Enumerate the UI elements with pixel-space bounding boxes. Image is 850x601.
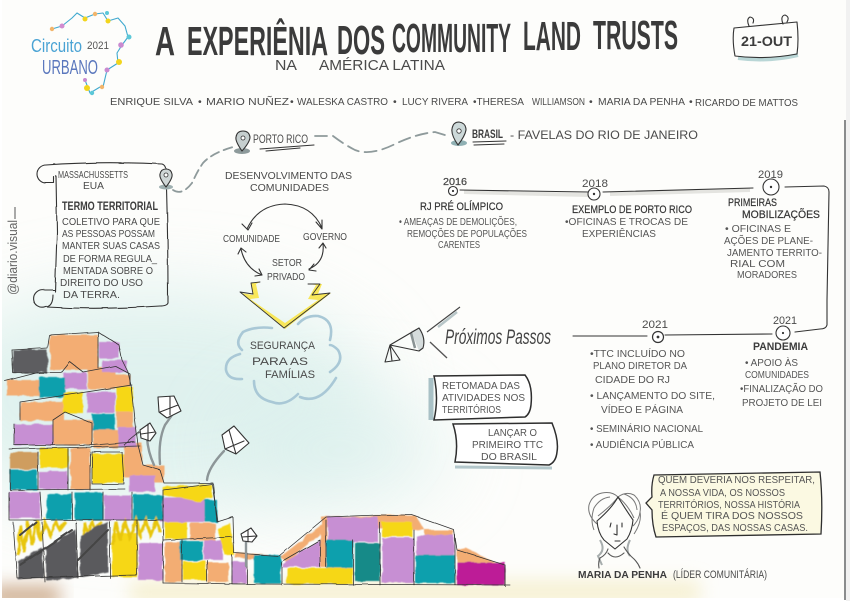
speakers list: RICARDO DE MATTOS: [695, 97, 798, 109]
title: A: [155, 18, 175, 64]
event text: [740, 356, 823, 409]
label: governo: GOVERNO: [303, 231, 347, 243]
event text: CIDADE DO RJ: [595, 375, 670, 386]
step text: [442, 381, 525, 416]
scroll body text: [60, 199, 160, 301]
scroll outline: [34, 163, 168, 308]
event text: CARENTES: [438, 240, 480, 251]
speakers list: •: [589, 96, 593, 108]
calendar date badge: [733, 15, 798, 59]
speakers list: •THERESA: [473, 96, 524, 108]
step text: TERRITÓRIOS: [442, 403, 501, 416]
event text: [565, 217, 688, 240]
year marker: 2021: [642, 319, 668, 331]
caption: Maria da Penha: MARIA DA PENHA: [578, 569, 667, 581]
event heading: PRIMEIRAS: [728, 197, 777, 209]
cycle diagram: [223, 204, 347, 283]
scroll body text: AS PESSOAS POSSAM: [62, 228, 155, 240]
timeline event: 2021 pandemia: [740, 315, 823, 409]
arrow: comunidade to setor privado: [238, 248, 262, 276]
scroll body text: DE FORMA REGULA_: [63, 253, 157, 265]
panel: Brasil heading: [451, 122, 698, 146]
date text: 21-OUT: [741, 33, 792, 49]
event text: • LANÇAMENTO DO SITE,: [590, 391, 715, 402]
quote text: É QUEM TIRA DOS NOSSOS: [661, 509, 803, 522]
event text: • AUDIÊNCIA PÚBLICA: [590, 438, 694, 451]
event text: [724, 224, 822, 281]
event text: RIAL COM: [730, 259, 785, 270]
title: DOS: [337, 17, 385, 63]
yellow hatch band: [18, 520, 160, 555]
hair: [589, 492, 640, 565]
heading: Brasil: BRASIL: [472, 129, 503, 141]
dark stair area: [18, 522, 108, 580]
event heading: EXEMPLO DE PORTO RICO: [572, 204, 692, 216]
scroll body text: TERMO TERRITORIAL: [62, 199, 158, 213]
label: setor privado: SETOR: [272, 257, 302, 269]
heading: Porto Rico: PORTO RICO: [253, 134, 308, 146]
cloud text: SEGURANÇA: [250, 340, 316, 352]
text: desenvolvimento das comunidades: COMUNIDADES: [250, 182, 329, 194]
icon: water tanks on poles: [140, 396, 257, 566]
event text: •FINALIZAÇÃO DO: [740, 382, 823, 395]
callout cloud: segurança: [226, 316, 340, 403]
step text: PRIMEIRO TTC: [472, 440, 543, 451]
heading: favelas do Rio de Janeiro: - FAVELAS DO RIO DE JANEIRO: [510, 130, 698, 142]
speakers list: MARIO NUÑEZ: [206, 95, 290, 108]
speakers list: •: [198, 96, 202, 108]
heading: Porto Rico: [253, 134, 314, 151]
event text: VÍDEO E PÁGINA: [601, 403, 683, 416]
event text: PROJETO DE LEI: [742, 398, 822, 409]
colored houses: [7, 335, 505, 585]
event text: •TTC INCLUÍDO NO: [590, 347, 685, 360]
logo text: 2021: 2021: [87, 40, 109, 52]
step text: DO BRASIL: [481, 452, 537, 463]
event text: MORADORES: [737, 270, 797, 281]
icon: location pin Porto Rico: [234, 131, 250, 154]
speakers list: •: [393, 96, 397, 108]
dashed route: Porto Rico to Brasil: [315, 132, 448, 152]
year marker: 2018: [582, 178, 608, 190]
event text: REMOÇÕES DE POPULAÇÕES: [407, 227, 527, 240]
event heading: MOBILIZAÇÕES: [742, 208, 820, 221]
event text: EXPERIÊNCIAS: [582, 227, 656, 240]
speakers list: WILLIAMSON: [532, 96, 585, 108]
arrow: setor privado to governo: [309, 243, 326, 271]
event heading: [728, 197, 820, 221]
title: COMMUNITY: [392, 15, 511, 61]
speakers list: WALESKA CASTRO: [297, 96, 388, 108]
timeline event: 2018: [565, 178, 692, 240]
timeline event: 2016: [399, 176, 527, 251]
speakers list: [110, 95, 798, 109]
scroll body text: DA TERRA.: [63, 289, 120, 301]
speakers list: ENRIQUE SILVA: [110, 96, 193, 108]
heading: próximos passos: Próximos Passos: [445, 326, 551, 349]
logo: Circuito Urbano 2021: [31, 11, 132, 95]
pen sketch lines: [5, 332, 510, 586]
speech bubble: quote: [646, 472, 822, 537]
caption: Maria da Penha: [578, 568, 767, 581]
logo text: Circuito: Circuito: [31, 36, 82, 56]
speakers list: LUCY RIVERA: [402, 96, 468, 108]
label: setor privado: PRIVADO: [267, 271, 305, 283]
event text: •OFICINAS E TROCAS DE: [565, 217, 688, 228]
scroll heading: EUA: [83, 180, 104, 192]
event text: PLANO DIRETOR DA: [593, 361, 687, 372]
quote text: [658, 475, 815, 534]
title: LAND: [523, 13, 581, 59]
event heading: RJ PRÉ OLÍMPICO: [420, 200, 503, 213]
scroll body text: DIREITO DO USO: [60, 277, 143, 289]
title: EXPERIÊNIA: [187, 18, 328, 64]
quote text: TERRITÓRIOS, NOSSA HISTÓRIA: [658, 498, 800, 511]
label: setor privado: [267, 257, 305, 283]
scroll body text: MANTER SUAS CASAS: [62, 240, 160, 252]
event text: • AMEAÇAS DE DEMOLIÇÕES,: [399, 215, 517, 228]
quote text: ESPAÇOS, DAS NOSSAS CASAS.: [662, 523, 808, 534]
portrait: Maria da Penha: [589, 492, 640, 568]
text: desenvolvimento das comunidades: [225, 170, 352, 194]
event text: COMUNIDADES: [745, 370, 809, 381]
shoulders: [599, 547, 640, 568]
cloud text: [250, 340, 316, 381]
event text: JAMENTO TERRITO-: [727, 248, 822, 259]
step text: RETOMADA DAS: [442, 381, 520, 392]
scroll heading: MASSACHUSSETTS: [58, 169, 128, 181]
heading: Brasil: [472, 129, 506, 145]
title: TRUSTS: [593, 12, 678, 58]
step text: [472, 428, 543, 463]
title: [155, 12, 678, 64]
quote text: QUEM DEVERIA NOS RESPEITAR,: [658, 475, 815, 486]
year marker: 2019: [758, 169, 783, 181]
quote text: A NOSSA VIDA, OS NOSSOS: [660, 488, 785, 499]
icon: megaphone: [385, 307, 460, 362]
subtitle: NA: [275, 57, 297, 74]
cloud text: PARA AS: [252, 356, 308, 368]
event heading: PANDEMIA: [753, 341, 808, 353]
step box: retomada: [431, 375, 531, 420]
subtitle: AMÉRICA LATINA: [319, 57, 445, 74]
logo text: Urbano: URBANO: [42, 57, 98, 79]
arrow: governo to comunidade: [242, 204, 322, 230]
step text: ATIVIDADES NOS: [442, 393, 525, 404]
timeline event: 2019: [724, 169, 822, 281]
year marker: 2016: [443, 176, 467, 188]
event text: [399, 215, 527, 251]
scroll body text: COLETIVO PARA QUE: [62, 216, 160, 228]
event text: • SEMINÁRIO NACIONAL: [590, 422, 703, 435]
arrow: yellow chevron: [240, 282, 331, 329]
speakers list: MARIA DA PENHA: [598, 96, 685, 108]
panel: Massachusetts scroll: [34, 163, 173, 308]
event text: • APOIO ÀS: [745, 356, 798, 369]
icon: location pin Brasil: [451, 122, 467, 146]
step text: LANÇAR O: [488, 428, 537, 439]
step box: lançar: [453, 423, 557, 468]
panel: próximos passos: [385, 307, 557, 468]
illustration: favela: [5, 332, 510, 586]
face: [597, 497, 633, 549]
panel: Porto Rico: [223, 131, 352, 403]
icon: location pin Massachusetts: [159, 169, 173, 190]
caption: Maria da Penha: (LÍDER COMUNITÁRIA): [673, 568, 767, 581]
cloud text: FAMÍLIAS: [265, 368, 315, 381]
label: comunidade: COMUNIDADE: [223, 233, 280, 245]
event text: [590, 347, 715, 451]
dashed route: Massachusetts to Porto Rico: [173, 147, 233, 192]
speakers list: •: [689, 96, 693, 108]
event text: • OFICINAS E: [725, 224, 791, 235]
credit: @diario.visual: @diario.visual: [5, 220, 20, 295]
event text: AÇÕES DE PLANE-: [724, 234, 813, 247]
timeline line: [460, 186, 829, 336]
text: desenvolvimento das comunidades: DESENVOLVIMENTO DAS: [225, 170, 352, 182]
timeline event: 2021: [590, 319, 715, 451]
scroll heading: [58, 169, 128, 192]
scroll body text: MENTADA SOBRE O: [63, 265, 153, 277]
year marker: 2021: [773, 315, 797, 327]
speakers list: •: [290, 96, 294, 108]
